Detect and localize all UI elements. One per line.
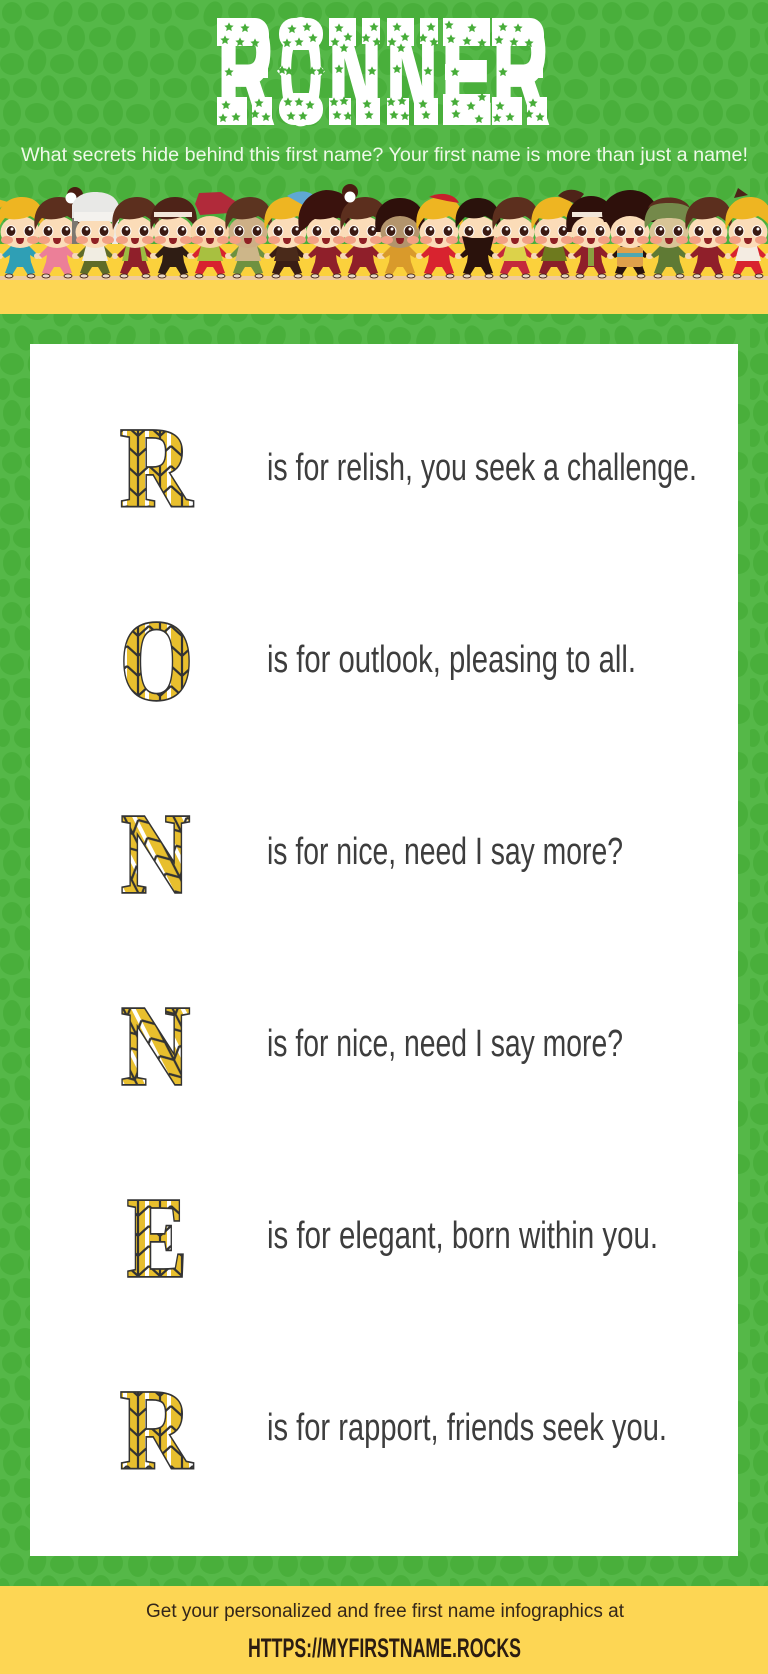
row 6: letter R: R — [120, 1366, 193, 1493]
row 2 sentence: is for outlook, pleasing to all. — [267, 639, 636, 681]
footer band — [0, 1586, 768, 1674]
row 1: letter R: R — [120, 404, 193, 531]
row 5: letter E: E — [127, 1174, 187, 1301]
row 3: letter N: N — [121, 790, 190, 917]
row 3 sentence: is for nice, need I say more? — [267, 831, 623, 873]
illustration: row of cartoon children — [0, 184, 768, 278]
footer URL: HTTPS://MYFIRSTNAME.ROCKS — [248, 1633, 521, 1663]
row 4 sentence: is for nice, need I say more? — [267, 1023, 623, 1065]
white content panel — [30, 344, 738, 1556]
row 3: letter N: N — [121, 790, 190, 917]
subtitle: What secrets hide behind this first name? Your first name is more than just a name! — [21, 145, 748, 166]
row 5 sentence: is for elegant, born within you. — [267, 1215, 658, 1257]
row 2: letter O: O — [120, 597, 193, 724]
yellow ground band — [0, 244, 768, 314]
title: RONNER — [217, 0, 548, 153]
footer text: Get your personalized and free first name infographics at — [146, 1601, 625, 1622]
row 1: letter R: R — [120, 404, 193, 531]
row 4: letter N: N — [121, 982, 190, 1109]
row 6: letter R: R — [120, 1366, 193, 1493]
row 5: letter E: E — [127, 1174, 187, 1301]
row 2: letter O: O — [120, 597, 193, 724]
row 4: letter N: N — [121, 982, 190, 1109]
